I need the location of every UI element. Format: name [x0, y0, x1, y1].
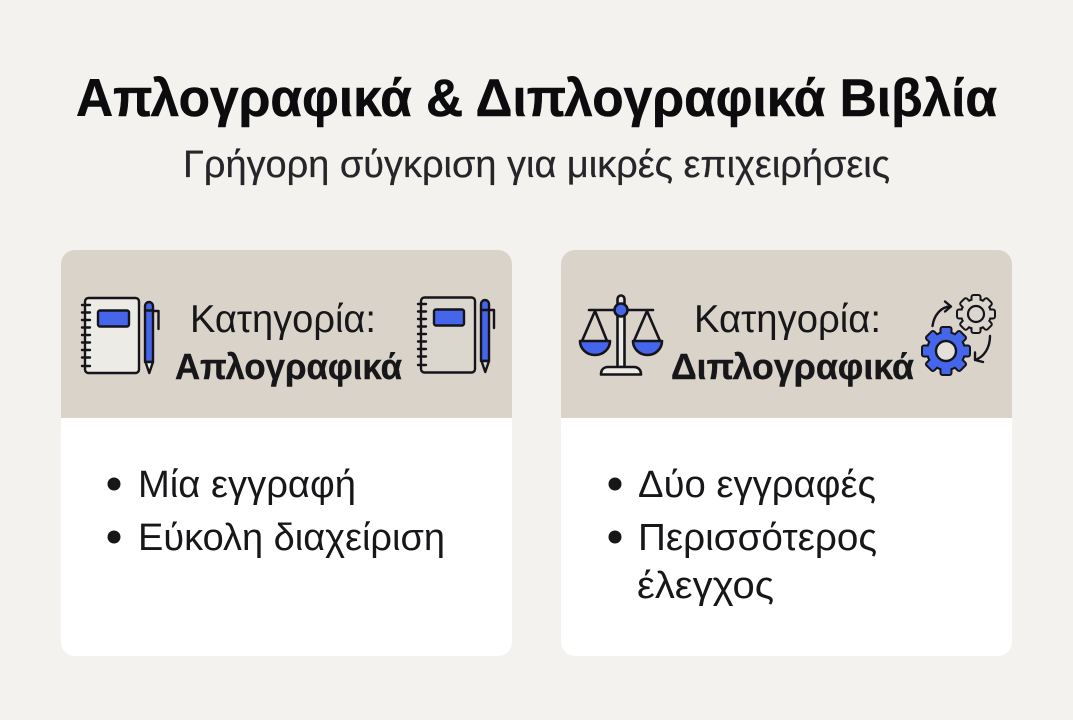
card header: left [61, 250, 512, 418]
small gear [958, 296, 994, 332]
bullet item: Μία εγγραφή: Μία εγγραφή [138, 464, 356, 506]
panel: Απλογραφικά [61, 250, 512, 656]
card body: left [61, 250, 512, 656]
header label: Απλογραφικά: Απλογραφικά [175, 346, 402, 387]
bullet item: Περισσότερος έλεγχος: Περισσότερος [638, 517, 877, 559]
bullet list: left [108, 464, 445, 559]
subtitle: Γρήγορη σύγκριση για μικρές επιχειρήσεις [183, 144, 890, 186]
header label: Διπλογραφικά: Διπλογραφικά [671, 346, 914, 387]
bullet item: Περισσότερος έλεγχος: έλεγχος [637, 565, 774, 607]
icon: gears with arrows [923, 296, 994, 374]
header label: Κατηγορία left: Κατηγορία: [190, 298, 376, 341]
bullet list: right [608, 464, 877, 607]
panel: Διπλογραφικά [561, 250, 1012, 656]
card body: right [561, 250, 1012, 656]
bullet item: Δύο εγγραφές: Δύο εγγραφές [638, 464, 876, 506]
icon: balance scale [580, 296, 662, 374]
card header: right [561, 250, 1012, 418]
title: Απλογραφικά & Διπλογραφικά Βιβλία [76, 69, 997, 128]
icon: notebook and pen, right of label [418, 298, 494, 372]
arrow: up to small gear [932, 302, 951, 326]
arrow: down to large gear [975, 336, 990, 362]
header label: Κατηγορία right: Κατηγορία: [694, 298, 881, 341]
bullet item: Περισσότερος έλεγχος [608, 517, 877, 607]
bullet item: Εύκολη διαχείριση: Εύκολη διαχείριση [138, 517, 445, 559]
icon: notebook and pen, left [82, 298, 158, 373]
large blue gear [923, 328, 969, 374]
